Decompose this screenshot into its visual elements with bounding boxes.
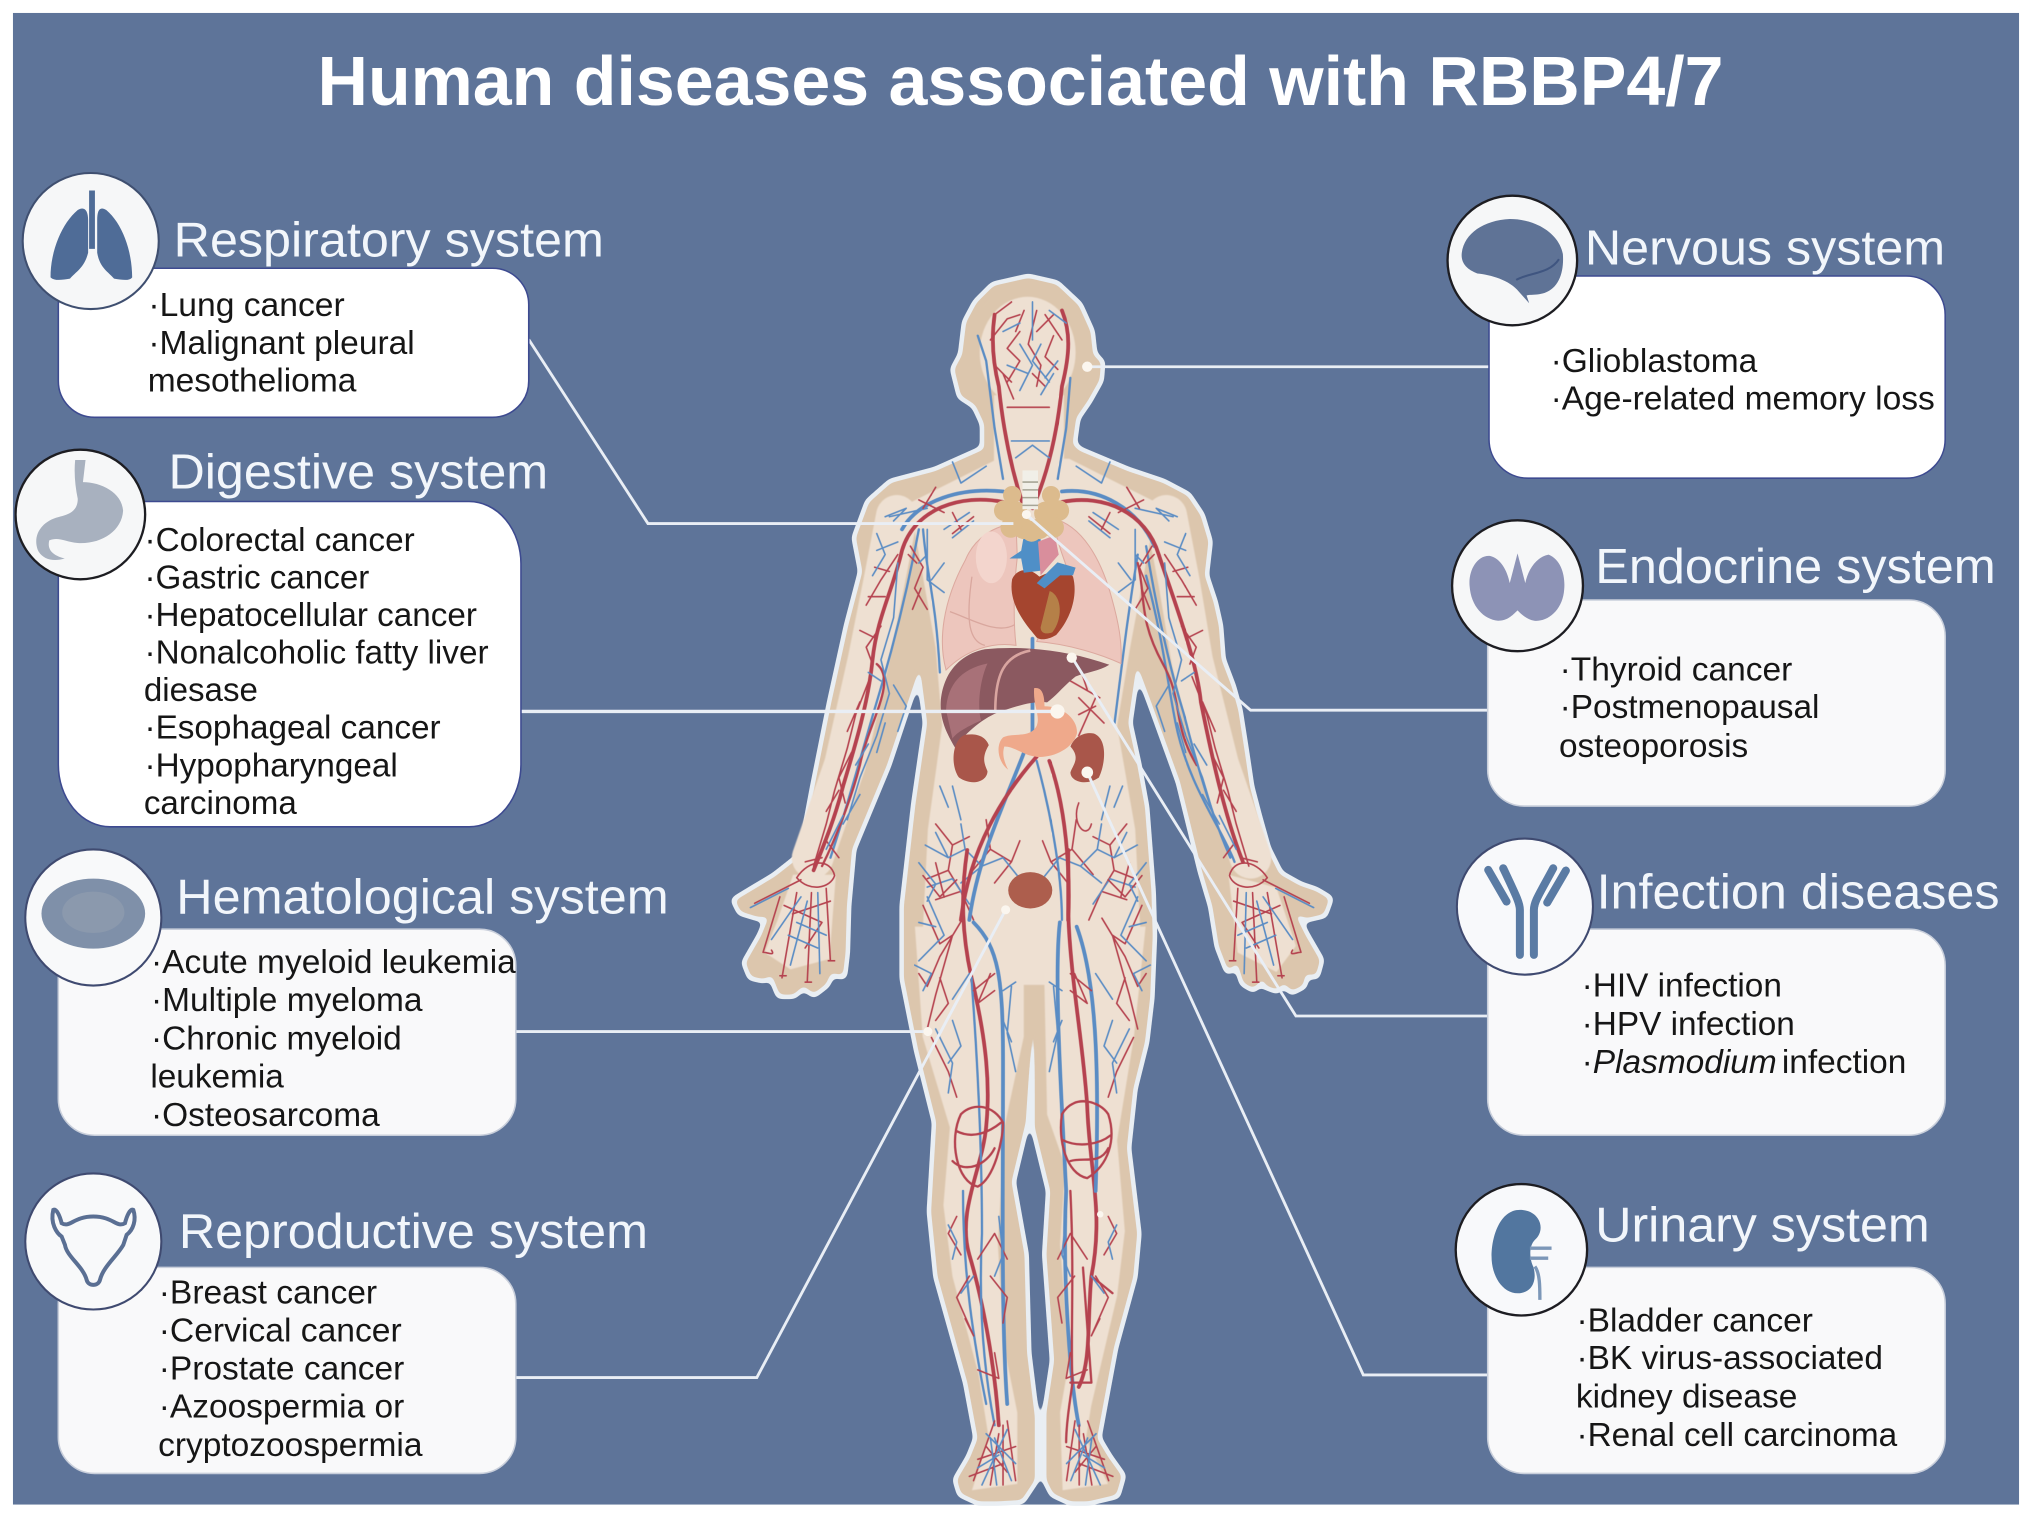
disease list <box>1559 651 1819 765</box>
disease list <box>1576 1303 1898 1454</box>
connector: urinary <box>1087 772 1488 1375</box>
panel: reproductive system <box>25 1173 648 1473</box>
disease list: ·Nonalcoholic fatty liver <box>144 635 489 672</box>
human body figure <box>736 279 1328 1501</box>
disease list: ·Thyroid cancer <box>1560 651 1792 688</box>
disease list: ·Cervical cancer <box>159 1312 402 1349</box>
disease list: ·Chronic myeloid <box>151 1021 402 1058</box>
heading: Digestive system <box>168 446 548 500</box>
icon: thyroid <box>1452 520 1583 651</box>
connector: respiratory <box>529 340 1013 524</box>
disease list <box>158 1275 423 1464</box>
connector: nervous <box>1089 366 1489 368</box>
panel: hematological system <box>25 849 669 1135</box>
disease list: ·Malignant pleural <box>148 325 415 362</box>
card <box>58 502 521 827</box>
heading: Respiratory system <box>174 214 604 268</box>
card <box>1488 1267 1945 1473</box>
card <box>58 268 529 417</box>
organ: heart <box>1010 529 1076 639</box>
disease list: cryptozoospermia <box>158 1427 423 1464</box>
body silhouette <box>736 279 1328 1501</box>
disease list <box>150 944 516 1134</box>
title: Human diseases associated with RBBP4/7 <box>318 42 1724 120</box>
icon: red blood cell <box>25 849 161 986</box>
disease list: ·Esophageal cancer <box>144 710 441 747</box>
disease list: ·Colorectal cancer <box>144 522 415 559</box>
upper body blood vessels <box>805 302 1257 920</box>
connector: digestive <box>521 710 1057 713</box>
disease list: ·HPV infection <box>1582 1006 1795 1043</box>
disease list <box>144 522 489 822</box>
disease list: leukemia <box>150 1058 284 1095</box>
icon: brain <box>1448 196 1577 325</box>
inner lighter body tissue <box>765 297 1296 1490</box>
disease list: kidney disease <box>1576 1378 1797 1415</box>
disease list: ·Prostate cancer <box>159 1351 404 1388</box>
panel: urinary system <box>1456 1184 1945 1473</box>
disease list: ·BK virus-associated <box>1576 1340 1883 1377</box>
white body outline <box>736 279 1328 1501</box>
disease list: ·Azoospermia or <box>159 1389 404 1426</box>
heading: Endocrine system <box>1595 540 1996 594</box>
disease list: osteoporosis <box>1559 728 1748 765</box>
icon: antibody <box>1457 839 1593 975</box>
panel: endocrine system <box>1452 520 1996 806</box>
icon: lungs <box>23 173 159 309</box>
connector: endocrine <box>1026 514 1488 710</box>
panel: respiratory system <box>23 173 604 417</box>
disease list: ·Postmenopausal <box>1560 689 1819 726</box>
disease list: carcinoma <box>144 785 297 822</box>
icon: kidney <box>1456 1184 1587 1315</box>
disease list: mesothelioma <box>148 362 357 399</box>
connector end dots <box>923 362 1103 1218</box>
disease list: ·Hepatocellular cancer <box>144 597 477 634</box>
heading: Urinary system <box>1595 1198 1930 1252</box>
card <box>58 929 516 1135</box>
disease list: ·Lung cancer <box>148 287 345 324</box>
lower body blood vessels <box>750 850 1314 1485</box>
organ: lungs <box>942 518 1121 670</box>
disease list <box>1551 343 1935 418</box>
disease list: ·Multiple myeloma <box>151 982 423 1019</box>
disease list <box>1582 968 1906 1081</box>
organ: stomach <box>999 688 1077 770</box>
icon: stomach <box>16 450 145 579</box>
card <box>1488 929 1945 1135</box>
connector: infection <box>1072 657 1488 1016</box>
panel: digestive system <box>16 446 548 827</box>
icon: uterus <box>25 1173 161 1310</box>
card <box>1489 276 1945 478</box>
card <box>1488 600 1945 806</box>
disease list: ·Acute myeloid leukemia <box>151 944 516 981</box>
heading: Reproductive system <box>179 1205 648 1259</box>
organ: liver <box>941 648 1109 748</box>
panel: nervous system <box>1448 196 1945 478</box>
disease list: ·Plasmodiuminfection <box>1582 1044 1906 1081</box>
card <box>58 1267 516 1473</box>
heading: Nervous system <box>1585 221 1945 275</box>
connector: reproductive <box>516 910 1006 1378</box>
disease list <box>148 287 415 399</box>
connector: hematological <box>516 1030 928 1033</box>
disease list: ·Breast cancer <box>159 1275 377 1312</box>
organ: bladder <box>1008 872 1052 908</box>
panel: infection diseases <box>1457 839 2000 1135</box>
disease list: ·Age-related memory loss <box>1551 381 1935 418</box>
disease list: ·HIV infection <box>1582 968 1782 1005</box>
disease list: ·Renal cell carcinoma <box>1576 1417 1898 1454</box>
heading: Infection diseases <box>1597 865 2000 919</box>
disease list: diesase <box>144 672 258 709</box>
organ: thyroid and trachea <box>994 470 1069 542</box>
disease list: ·Glioblastoma <box>1551 343 1758 380</box>
heading: Hematological system <box>176 871 669 925</box>
disease list: ·Hypopharyngeal <box>144 747 398 784</box>
disease list: ·Bladder cancer <box>1576 1303 1813 1340</box>
organ: kidneys <box>954 733 1104 782</box>
disease list: ·Osteosarcoma <box>151 1097 380 1134</box>
disease list: ·Gastric cancer <box>144 559 369 596</box>
